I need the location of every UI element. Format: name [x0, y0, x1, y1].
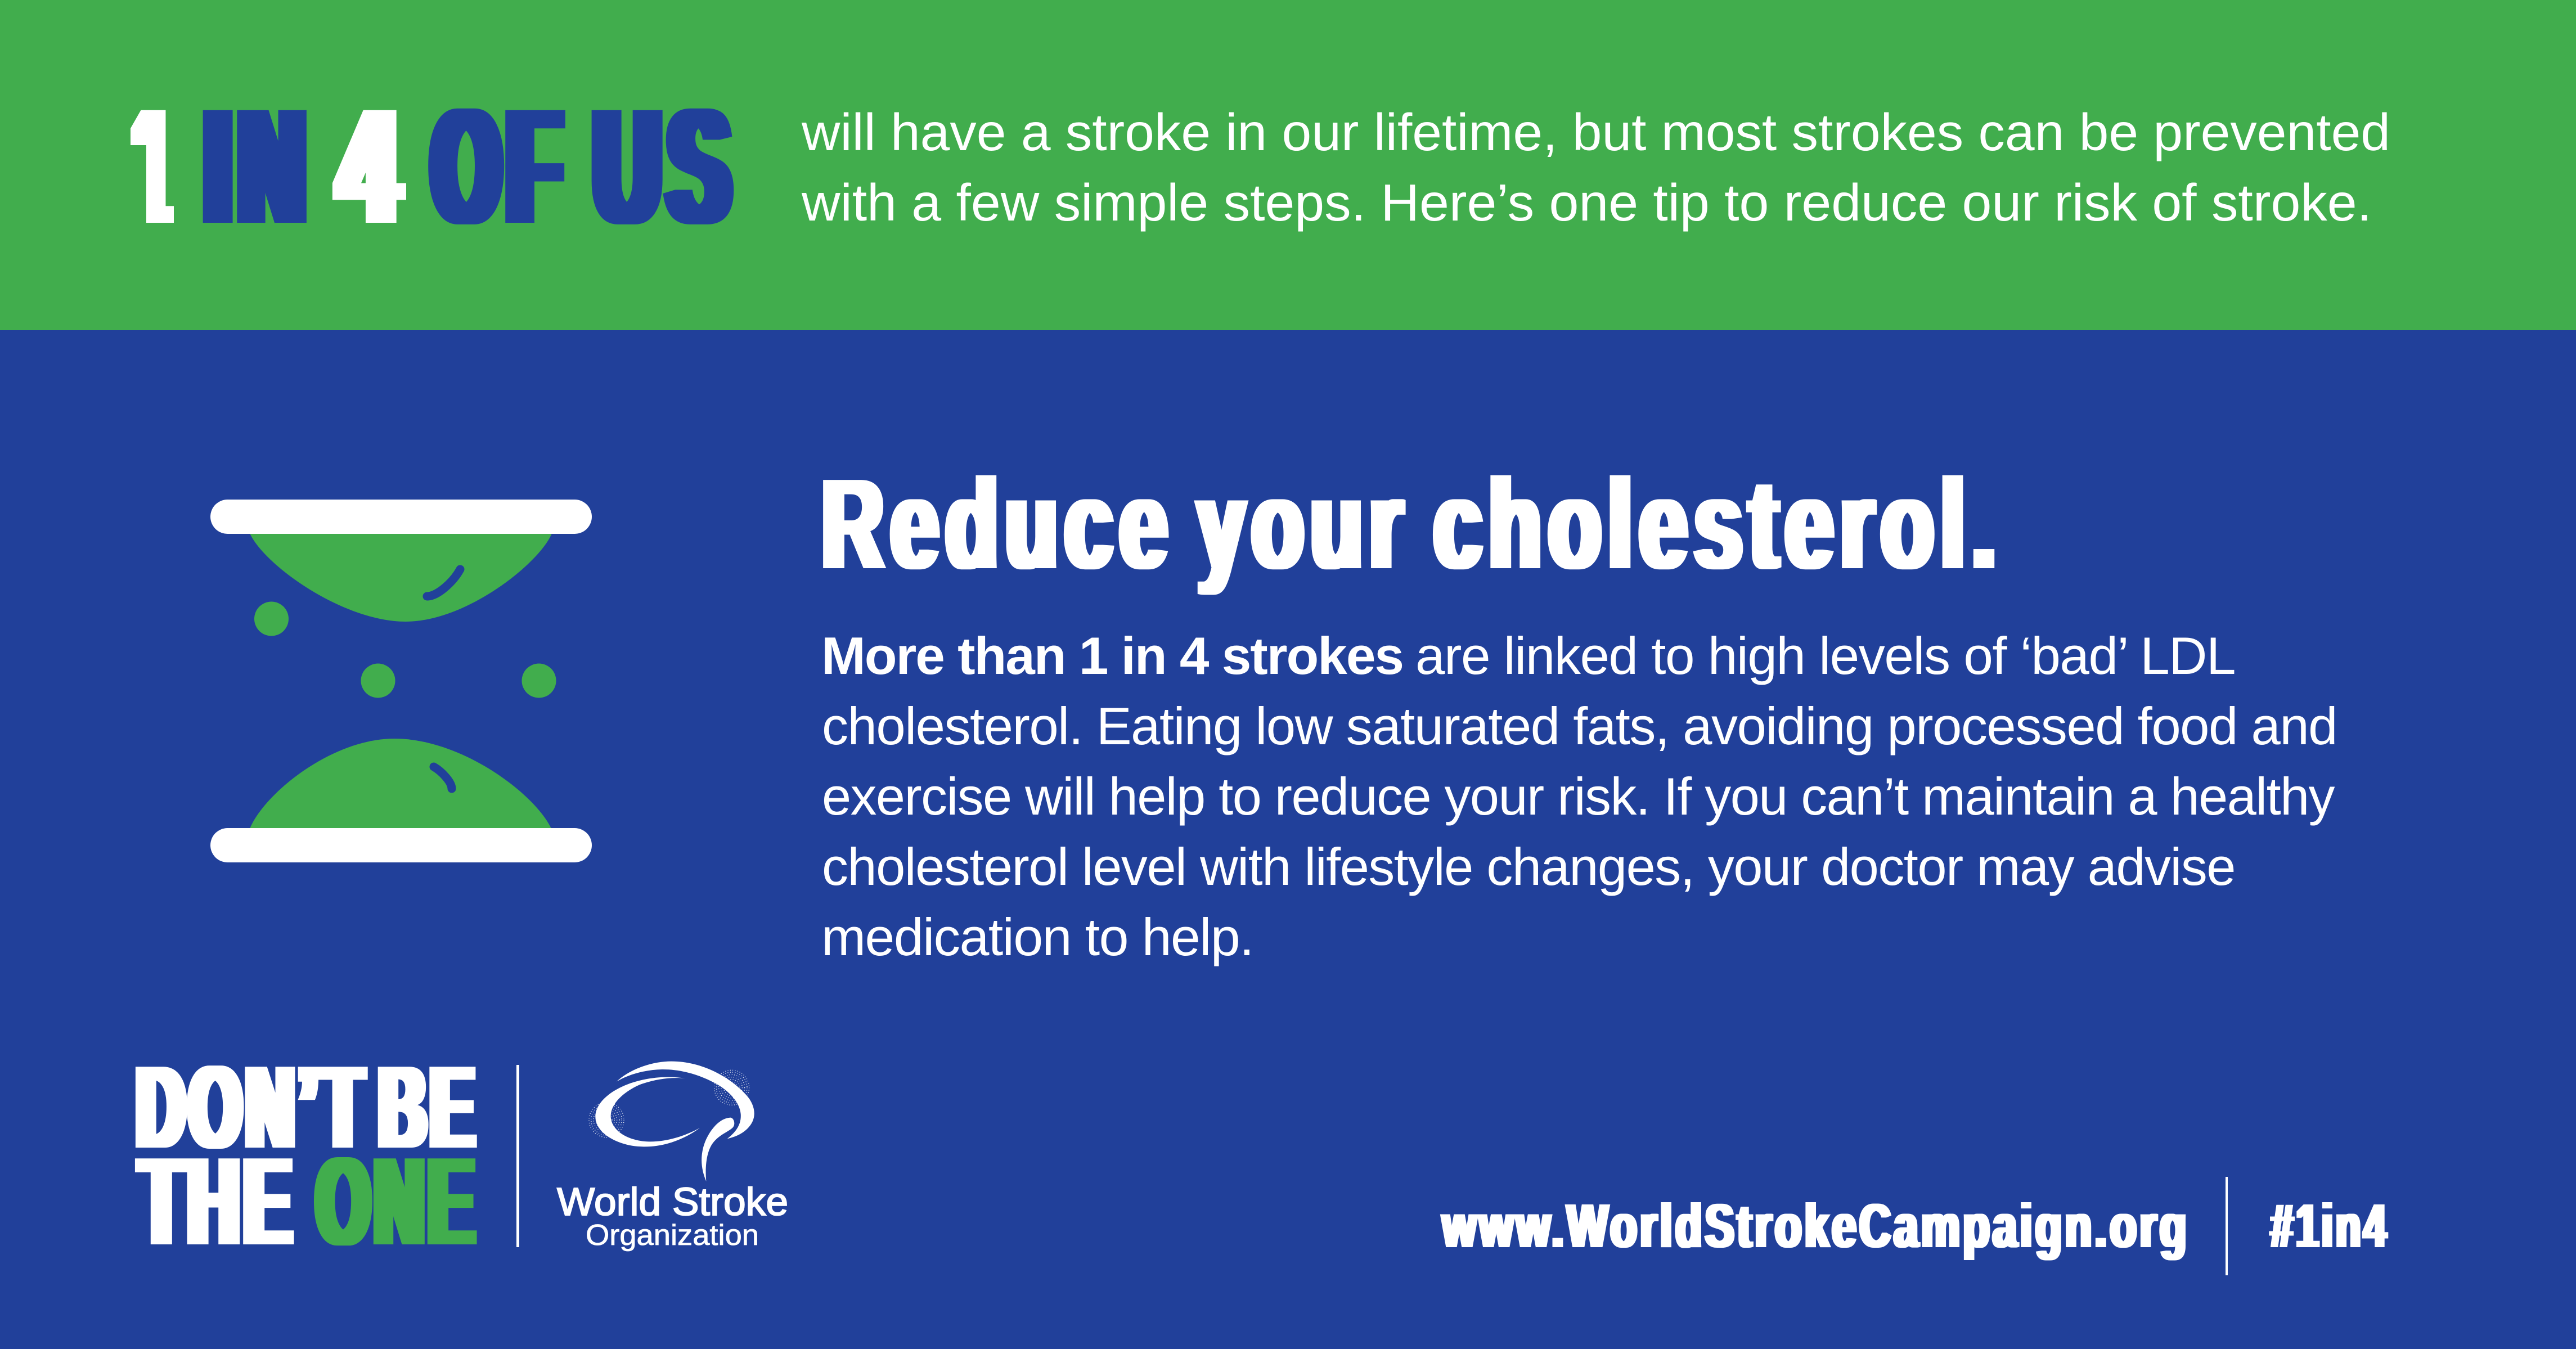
text block: cholesterol advice: medication to help. [821, 907, 1253, 966]
icon: brain emblem [589, 1062, 754, 1181]
logo: don't be the one: THE [140, 1132, 296, 1271]
logo: world stroke organization [557, 1062, 788, 1252]
text block: cholesterol advice: are linked to high levels of ‘bad’ LDL [1415, 626, 2235, 685]
text block: cholesterol advice [821, 626, 2337, 966]
heading: 1 in 4 of us: IN [205, 75, 313, 258]
text block: header sentence [801, 103, 2390, 232]
heading: 1 in 4 of us: 4 [339, 75, 399, 258]
heading: 1 in 4 of us: 1 [135, 75, 169, 258]
heading: reduce your cholesterol: your [1198, 453, 1410, 596]
heading: 1 in 4 of us: OF [433, 75, 569, 258]
icon: cholesterol blood vessel [210, 500, 592, 862]
text block: cholesterol advice: More than 1 in 4 strokes [821, 626, 1403, 685]
heading: reduce your cholesterol: cholesterol. [1434, 453, 2003, 596]
text block: header sentence: with a few simple steps. Here’s one tip to reduce our risk of stroke. [801, 173, 2372, 232]
text block: header sentence: will have a stroke in our lifetime, but most strokes can be prevented [801, 103, 2390, 161]
heading: 1 in 4 of us [131, 108, 734, 224]
text block: cholesterol advice: exercise will help to reduce your risk. If you can’t maintain a healthy [822, 767, 2335, 826]
text: hashtag: #1in4 [2271, 1191, 2389, 1261]
logo: don't be the one: DON’T [137, 1042, 368, 1173]
heading: reduce your cholesterol [822, 453, 2003, 596]
text: campaign url: www.WorldStrokeCampaign.org [1442, 1191, 2190, 1261]
text block: cholesterol advice: cholesterol. Eating low saturated fats, avoiding processed food and [822, 696, 2337, 756]
logo: world stroke organization: World Stroke [557, 1180, 788, 1224]
heading: reduce your cholesterol: Reduce [822, 453, 1175, 596]
logo: don't be the one [137, 1042, 479, 1271]
text block: cholesterol advice: cholesterol level with lifestyle changes, your doctor may advise [822, 837, 2235, 896]
logo: don't be the one: ONE [317, 1132, 479, 1271]
panel: green header band [0, 0, 2576, 330]
logo: world stroke organization: Organization [586, 1219, 759, 1252]
heading: 1 in 4 of us: US [595, 75, 738, 258]
logo: don't be the one: BE [379, 1042, 479, 1173]
